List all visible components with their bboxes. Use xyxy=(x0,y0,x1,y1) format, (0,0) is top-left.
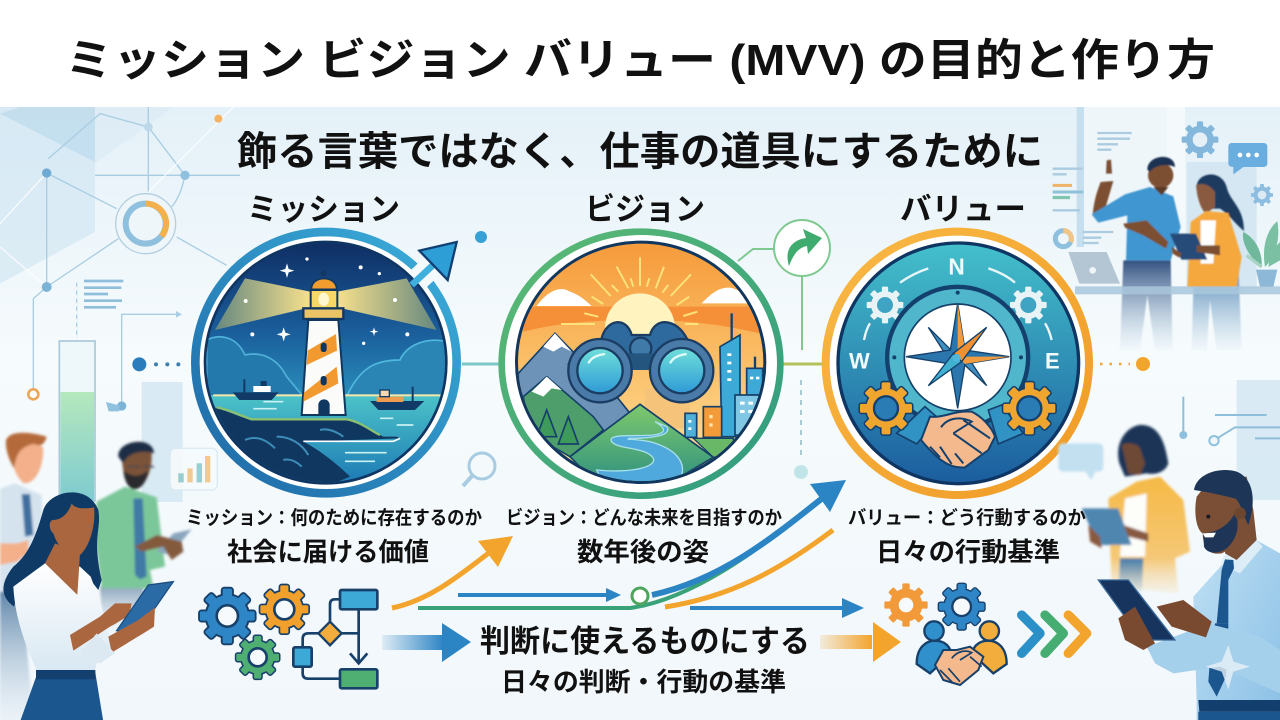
panel: vision xyxy=(502,192,830,496)
ring: mission xyxy=(193,230,459,495)
title: ミッション ビジョン バリュー (MVV) の目的と作り方 xyxy=(65,36,1215,85)
arrow: blue rising xyxy=(652,480,846,595)
heading: value: バリュー xyxy=(900,192,1026,227)
ring: value xyxy=(826,232,1089,495)
right lower decoration xyxy=(1179,380,1280,500)
arrow: mission xyxy=(412,242,457,285)
text: mission description: ミッション：何のために存在するのか xyxy=(186,507,482,529)
person: woman with tablet xyxy=(1170,174,1244,350)
text: mission description xyxy=(186,507,482,567)
person: man pointing xyxy=(1092,157,1181,350)
person: man in green xyxy=(95,442,192,633)
person: man left xyxy=(0,433,47,720)
right office scene xyxy=(1053,107,1280,350)
text: vision description: ビジョン：どんな未来を目指すのか xyxy=(506,507,782,529)
left network decoration xyxy=(0,107,240,502)
arrow: large blue xyxy=(382,623,471,662)
compass letters: N xyxy=(948,253,965,279)
icon: team and handshake xyxy=(884,583,1007,685)
heading: vision: ビジョン xyxy=(585,192,705,227)
person: woman with tablet xyxy=(3,492,173,720)
text: mission description: 社会に届ける価値 xyxy=(227,537,429,567)
icon: compass and handshake xyxy=(835,240,1082,487)
text: bottom call to action xyxy=(480,624,810,697)
compass letters: E xyxy=(1045,349,1060,374)
flow arrows xyxy=(382,480,1087,662)
text: bottom call to action: 日々の判断・行動の基準 xyxy=(501,667,786,697)
icon: upward arrow badge xyxy=(774,220,830,276)
arrow: blue long xyxy=(690,598,864,618)
office backdrop xyxy=(1053,107,1280,289)
arrow: orange rising xyxy=(392,536,513,608)
subtitle: 飾る言葉ではなく、仕事の道具にするために xyxy=(237,130,1043,174)
text: vision description: 数年後の姿 xyxy=(577,537,709,567)
text: value description: 日々の行動基準 xyxy=(876,537,1060,567)
compass letters xyxy=(849,253,1060,374)
icon: lighthouse scene xyxy=(203,240,450,488)
arrow: orange second xyxy=(665,530,833,607)
arrow: blue short xyxy=(458,588,621,602)
connectors and small accents xyxy=(462,231,1150,486)
descriptions xyxy=(186,507,1086,567)
text: bottom call to action: 判断に使えるものにする xyxy=(480,624,810,659)
icon: gears and flowchart xyxy=(200,585,377,688)
compass letters: W xyxy=(849,349,870,374)
background people left xyxy=(0,433,217,720)
arrow: triple chevrons xyxy=(1022,615,1087,653)
text: value description xyxy=(848,507,1086,567)
heading: mission: ミッション xyxy=(247,192,400,227)
icon: binoculars scene xyxy=(513,240,770,487)
arrow: green rising line xyxy=(418,500,820,608)
panel: value xyxy=(826,192,1089,495)
chart bubble xyxy=(170,448,217,490)
arrow: large orange xyxy=(820,622,901,662)
background person: woman in yellow xyxy=(1058,425,1190,597)
panel: mission xyxy=(193,192,459,495)
text: value description: バリュー：どう行動するのか xyxy=(848,507,1086,529)
ring: vision xyxy=(502,232,780,496)
text: vision description xyxy=(506,507,782,567)
person: man with tablet xyxy=(1098,470,1280,720)
